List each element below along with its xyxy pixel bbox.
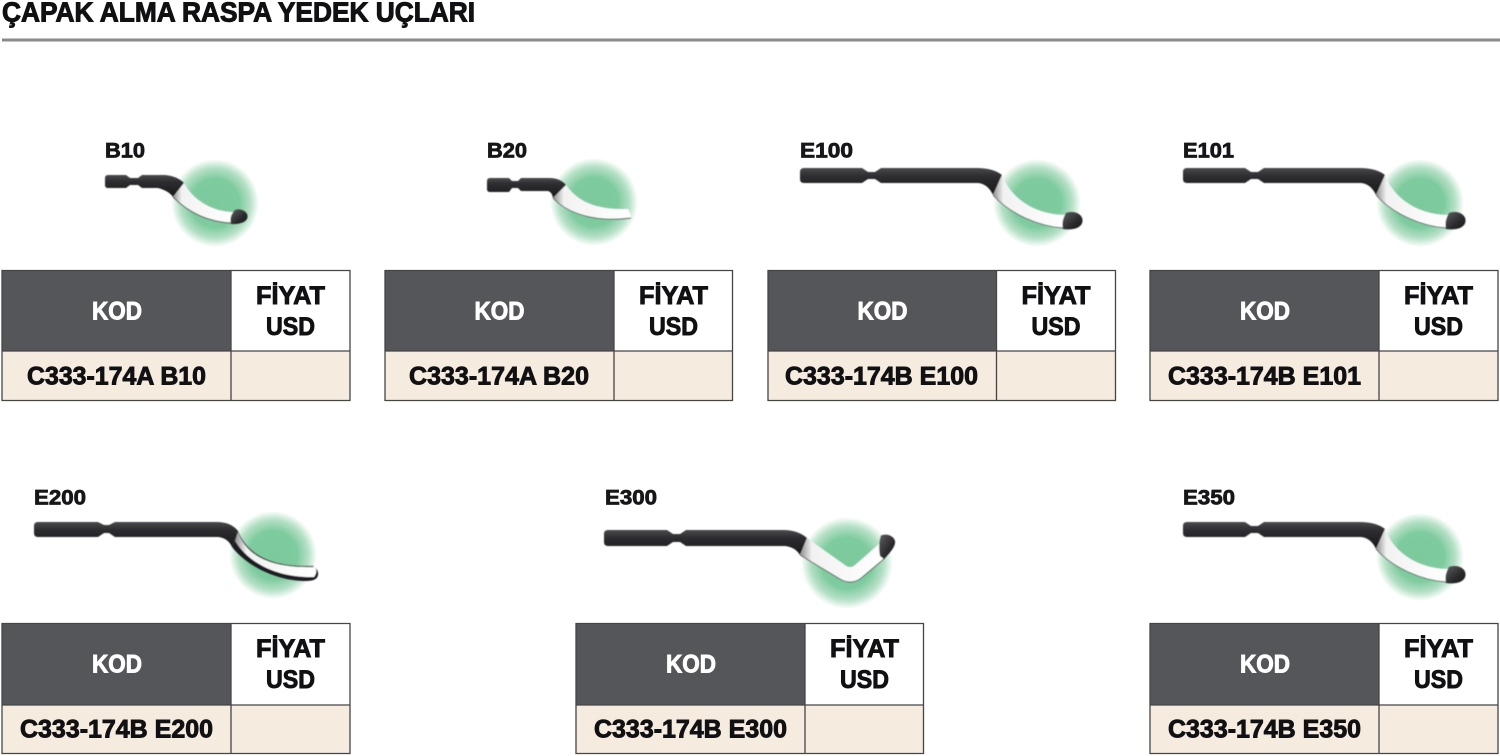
product: E101 (1150, 138, 1498, 401)
table: B10: FİYAT (256, 282, 325, 310)
table: E101 (1150, 270, 1498, 401)
table: E350 (1150, 624, 1498, 754)
product: B10 (2, 138, 350, 401)
table: E101: FİYAT (1404, 282, 1473, 310)
table: B10: KOD (92, 298, 142, 326)
label: E300: E300 (605, 486, 657, 510)
table: E300: FİYAT (830, 635, 899, 663)
table: B20: FİYAT (639, 282, 708, 310)
table: E200: USD (266, 666, 315, 694)
label: E101: E101 (1183, 138, 1234, 162)
table: B10 (2, 270, 350, 401)
icon: B10 blade (105, 159, 259, 247)
table: E350: C333-174B E350 (1168, 716, 1361, 744)
product: B20 (385, 138, 732, 401)
product: E200 (2, 486, 350, 754)
table: E200 (2, 624, 350, 754)
table: B20 (385, 270, 732, 401)
table: E200: KOD (92, 650, 142, 678)
label: E200: E200 (34, 486, 86, 510)
product: E350 (1150, 486, 1498, 754)
table: E300: KOD (666, 650, 716, 678)
table: E101: USD (1414, 313, 1463, 341)
table: E100: C333-174B E100 (785, 362, 978, 390)
product: E300 (576, 486, 924, 754)
table: E101: C333-174B E101 (1168, 362, 1361, 390)
table: E100: KOD (858, 298, 908, 326)
label: B20: B20 (487, 138, 527, 162)
label: E100: E100 (800, 138, 853, 162)
icon: E200 blade (34, 511, 318, 599)
icon: E100 blade (800, 159, 1083, 247)
table: E101: KOD (1240, 298, 1290, 326)
icon: E300 blade (604, 517, 895, 609)
table: B10: USD (266, 313, 315, 341)
table: E100: USD (1032, 313, 1080, 341)
table: E200: C333-174B E200 (20, 716, 213, 744)
table: B10: C333-174A B10 (27, 362, 206, 390)
table: E350: FİYAT (1404, 635, 1473, 663)
table: E300: USD (840, 666, 889, 694)
table: E200: FİYAT (256, 635, 325, 663)
icon: B20 blade (487, 158, 638, 246)
label: B10: B10 (105, 138, 145, 162)
table: E350: KOD (1240, 650, 1290, 678)
product: E100 (768, 138, 1116, 401)
table: E100 (768, 270, 1116, 401)
icon: E101 blade (1183, 159, 1466, 247)
table: B20: USD (649, 313, 698, 341)
icon: E350 blade (1183, 513, 1466, 601)
table: E300 (576, 624, 924, 754)
label: E350: E350 (1183, 486, 1235, 510)
table: E350: USD (1414, 666, 1463, 694)
table: E300: C333-174B E300 (594, 716, 787, 744)
table: B20: KOD (474, 298, 524, 326)
table: B20: C333-174A B20 (409, 362, 589, 390)
table: E100: FİYAT (1022, 282, 1090, 310)
